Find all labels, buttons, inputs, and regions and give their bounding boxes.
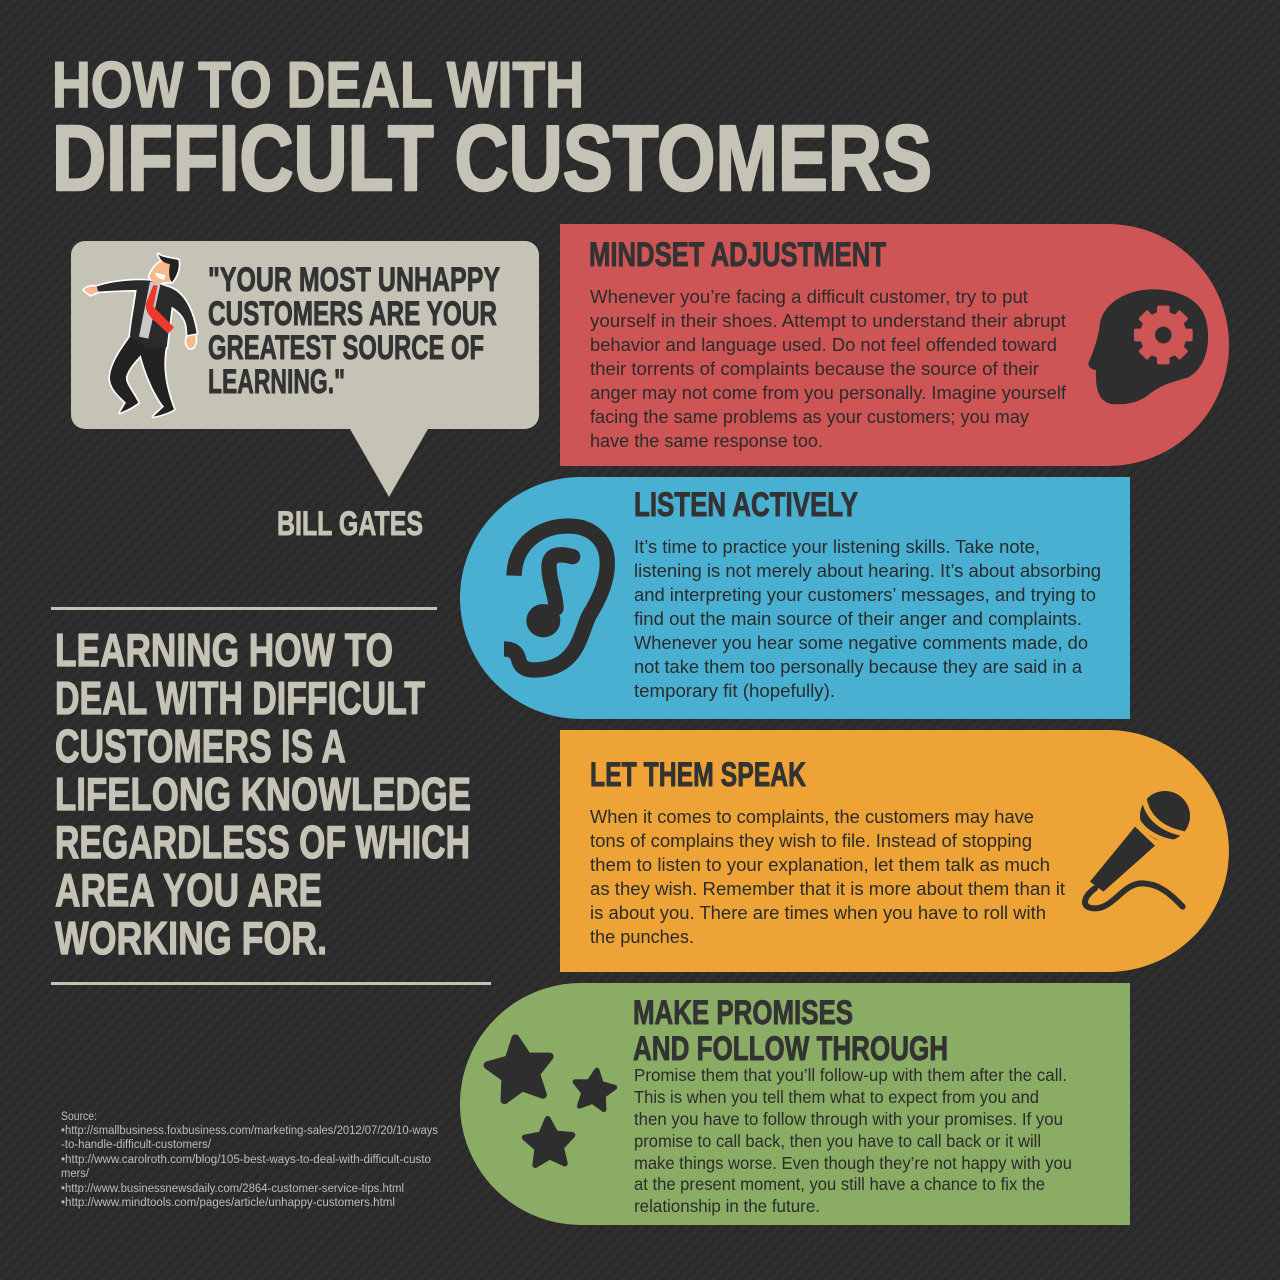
heading: listen actively: LISTEN ACTIVELY (634, 486, 858, 524)
body text: mindset adjustment: anger may not come from you personally. Imagine yourself (590, 382, 1067, 403)
quote text: LEARNING." (208, 363, 345, 401)
icon: ear (504, 526, 607, 670)
body text: listen actively: find out the main source of their anger and complaints. (634, 608, 1082, 629)
statement text block: CUSTOMERS IS A (55, 720, 346, 772)
body text: make promises: at the present moment, you still have a chance to fix the (634, 1174, 1045, 1194)
source list: •http://www.mindtools.com/pages/article/unhappy-customers.html (61, 1197, 395, 1209)
icon: head with gear (1088, 289, 1208, 404)
source list: •http://smallbusiness.foxbusiness.com/marketing-sales/2012/07/20/10-ways (61, 1125, 438, 1137)
title (52, 48, 932, 210)
statement text block: LIFELONG KNOWLEDGE (55, 768, 471, 820)
body text: make promises: Promise them that you’ll follow-up with them after the call. (634, 1065, 1067, 1085)
statement text block: WORKING FOR. (55, 912, 327, 964)
body text: mindset adjustment: have the same response too. (590, 430, 823, 451)
heading: make promises and follow through (633, 994, 948, 1068)
statement text block: DEAL WITH DIFFICULT (55, 672, 425, 724)
body text: listen actively: not take them too personally because they are said in a (634, 656, 1083, 677)
panel: let them speak (560, 730, 1229, 972)
heading: make promises and follow through: AND FOLLOW THROUGH (633, 1030, 948, 1068)
body text: mindset adjustment: their torrents of complaints because the source of their (590, 358, 1039, 379)
body text: listen actively: and interpreting your customers’ messages, and trying to (634, 584, 1096, 605)
body text: let them speak: them to listen to your explanation, let them talk as much (590, 854, 1050, 875)
statement text block: AREA YOU ARE (55, 864, 322, 916)
body text: let them speak: is about you. There are times when you have to roll with (590, 902, 1046, 923)
quote text (208, 261, 500, 401)
body text: make promises (634, 1065, 1072, 1216)
title: HOW TO DEAL WITH (52, 48, 584, 121)
quote text: GREATEST SOURCE OF (208, 329, 484, 367)
body text: let them speak (590, 806, 1065, 947)
body text: mindset adjustment: yourself in their shoes. Attempt to understand their abrupt (590, 310, 1066, 331)
body text: mindset adjustment: behavior and language used. Do not feel offended toward (590, 334, 1057, 355)
body text: let them speak: When it comes to complaints, the customers may have (590, 806, 1034, 827)
body text: let them speak: the punches. (590, 926, 694, 947)
body text: make promises: promise to call back, then you have to call back or it will (634, 1131, 1041, 1151)
quote text: CUSTOMERS ARE YOUR (208, 295, 497, 333)
body text: listen actively: listening is not merely about hearing. It’s about absorbing (634, 560, 1101, 581)
quote attribution: BILL GATES (277, 505, 423, 543)
body text: listen actively: Whenever you hear some negative comments made, do (634, 632, 1088, 653)
title: DIFFICULT CUSTOMERS (52, 106, 932, 210)
statement text block (55, 624, 471, 964)
source list: •http://www.businessnewsdaily.com/2864-customer-service-tips.html (61, 1183, 404, 1195)
body text: make promises: then you have to follow through with your promises. If you (634, 1109, 1063, 1129)
source list: mers/ (61, 1168, 90, 1180)
panel: mindset adjustment (560, 224, 1229, 466)
quote text: "YOUR MOST UNHAPPY (208, 261, 500, 299)
source list: •http://www.carolroth.com/blog/105-best-ways-to-deal-with-difficult-custo (61, 1154, 431, 1166)
statement text block: LEARNING HOW TO (55, 624, 393, 676)
body text: make promises: relationship in the future. (634, 1196, 820, 1216)
source list: Source: (61, 1111, 97, 1123)
statement text block: REGARDLESS OF WHICH (55, 816, 470, 868)
source list: -to-handle-difficult-customers/ (61, 1139, 212, 1151)
icon: panicking businessman (84, 254, 197, 417)
body text: let them speak: as they wish. Remember that it is more about them than it (590, 878, 1065, 899)
panel: make promises and follow through (460, 983, 1130, 1225)
panel: quote speech bubble (71, 241, 539, 497)
body text: let them speak: tons of complains they wish to file. Instead of stopping (590, 830, 1032, 851)
body text: listen actively: It’s time to practice your listening skills. Take note, (634, 536, 1040, 557)
body text: listen actively (634, 536, 1101, 701)
icon: three stars (484, 1034, 617, 1165)
panel: listen actively (460, 477, 1130, 719)
body text: mindset adjustment: facing the same problems as your customers; you may (590, 406, 1030, 427)
heading: let them speak: LET THEM SPEAK (590, 756, 806, 794)
heading: mindset adjustment: MINDSET ADJUSTMENT (589, 236, 886, 274)
heading: make promises and follow through: MAKE PROMISES (633, 994, 853, 1032)
body text: mindset adjustment: Whenever you’re facing a difficult customer, try to put (590, 286, 1028, 307)
body text: make promises: make things worse. Even though they’re not happy with you (634, 1153, 1072, 1173)
body text: listen actively: temporary fit (hopefully). (634, 680, 835, 701)
body text: mindset adjustment (590, 286, 1067, 451)
body text: make promises: This is when you tell them what to expect from you and (634, 1087, 1039, 1107)
source list (61, 1111, 438, 1209)
icon: microphone (1085, 791, 1192, 908)
